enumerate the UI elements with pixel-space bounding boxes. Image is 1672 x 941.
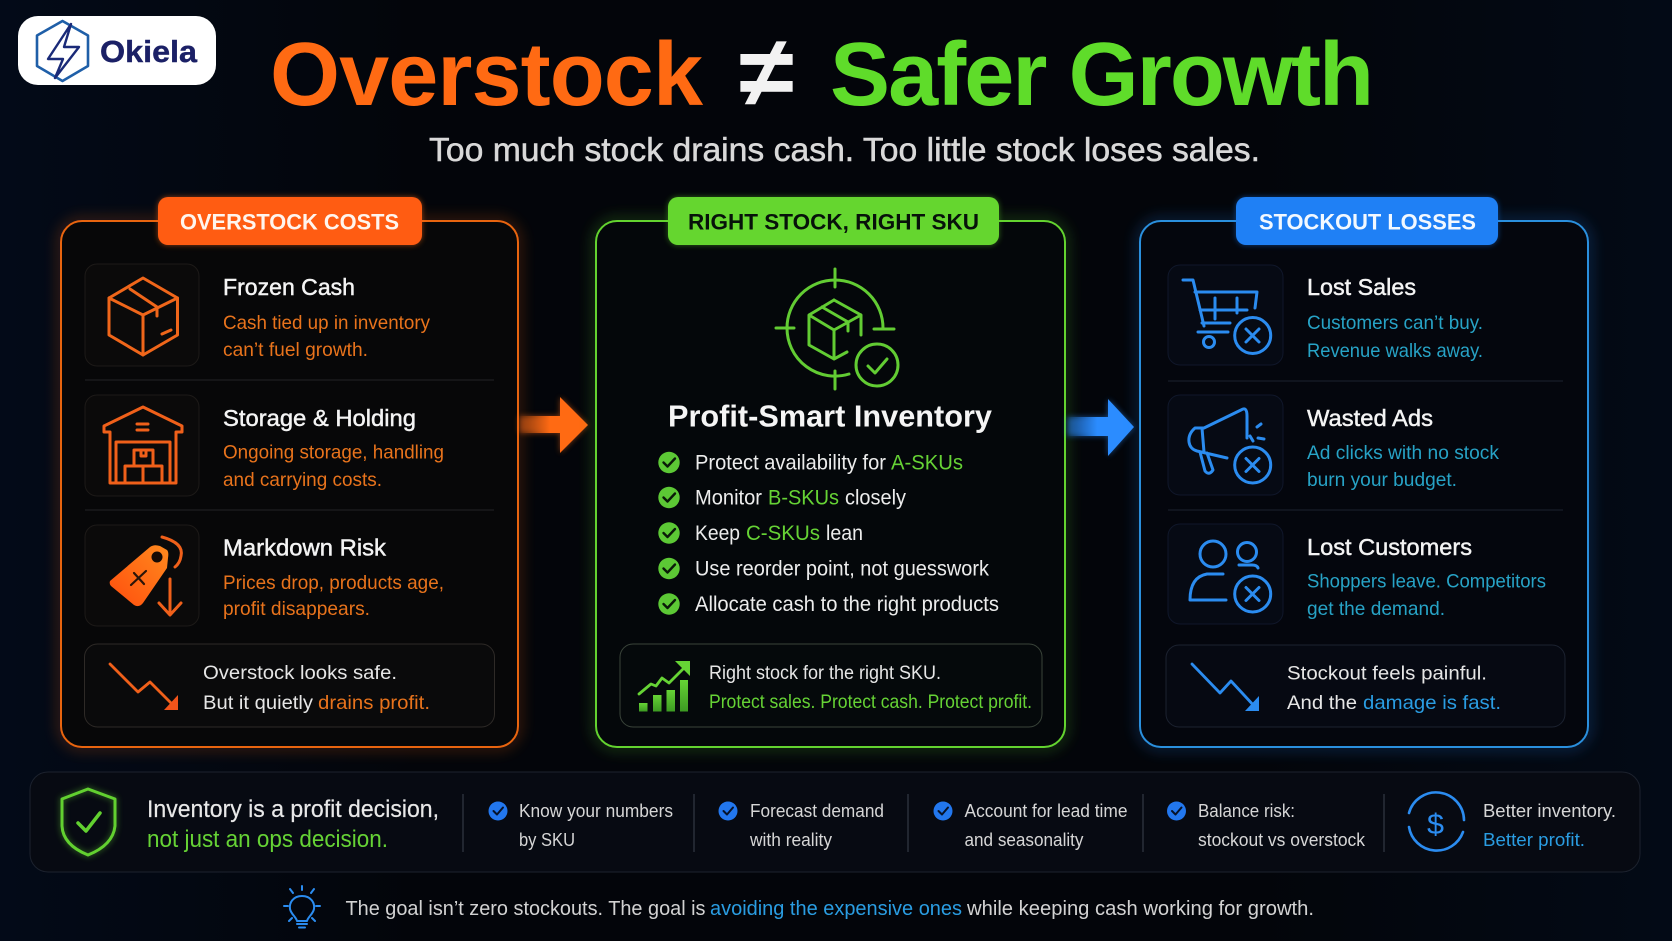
- callout: stockout feels painful: Stockout feels painful.: [1287, 662, 1487, 684]
- callout: overstock looks safe: But it quietly: [203, 692, 313, 714]
- title: ≠: [739, 16, 794, 128]
- callout: right stock for the right SKU: Right stock for the right SKU.: [709, 662, 941, 684]
- logo: Okiela: [18, 16, 216, 85]
- badge: overstock costs: [158, 197, 422, 245]
- arrow: right stock to stockout: [1067, 399, 1134, 456]
- tip: balance risk: [1167, 800, 1366, 850]
- title: Safer Growth: [830, 25, 1374, 125]
- icon: box: [109, 278, 178, 355]
- item: frozen cash: can’t fuel growth.: [223, 339, 368, 361]
- callout: right stock for the right SKU: Protect sales. Protect cash. Protect profit.: [709, 691, 1032, 713]
- item: A-SKUs: [658, 452, 963, 474]
- footer note: [284, 886, 1314, 928]
- item: C-SKUs: Keep: [695, 522, 740, 545]
- logo: Okiela: Okiela: [100, 34, 198, 69]
- title: Overstock: [270, 25, 704, 125]
- item: C-SKUs: C-SKUs: [746, 522, 820, 545]
- item: A-SKUs: Protect availability for: [695, 452, 886, 474]
- tip: lead time: [934, 800, 1128, 850]
- item: lost sales: [1168, 265, 1483, 365]
- callout: stockout feels painful: And the: [1287, 692, 1357, 714]
- item: storage and holding: and carrying costs.: [223, 469, 382, 491]
- item: frozen cash: Frozen Cash: [223, 274, 355, 300]
- tip: lead time: and seasonality: [964, 829, 1084, 850]
- callout: overstock looks safe: Overstock looks safe.: [203, 662, 397, 684]
- subtitle: Too much stock drains cash. Too little stock loses sales.: [429, 131, 1260, 168]
- tip: balance risk: Balance risk:: [1198, 800, 1295, 821]
- item: lost customers: get the demand.: [1307, 598, 1445, 620]
- headline: profit decision: not just an ops decision.: [147, 826, 388, 853]
- badge: right stock, right SKU: [668, 197, 999, 245]
- tip: know your numbers: Know your numbers: [519, 800, 673, 821]
- item: wasted ads: Wasted Ads: [1307, 405, 1433, 431]
- message: better profit: Better inventory.: [1483, 800, 1616, 821]
- panel: stockout losses: [1140, 197, 1588, 747]
- item: A-SKUs: A-SKUs: [891, 452, 963, 474]
- item: C-SKUs: lean: [826, 522, 863, 545]
- tip: forecast demand: with reality: [749, 829, 833, 850]
- icon: growth chart: [639, 661, 690, 712]
- badge: stockout losses: [1236, 197, 1498, 245]
- icon: target with box and check: [776, 269, 898, 389]
- callout: overstock looks safe: drains profit.: [318, 692, 430, 714]
- icon: falling arrow: [1192, 664, 1259, 711]
- item: C-SKUs: [658, 522, 863, 545]
- icon: dollar circle: $: [1427, 809, 1444, 841]
- icon: megaphone with x: [1189, 409, 1271, 483]
- badge: stockout losses: STOCKOUT LOSSES: [1259, 210, 1476, 234]
- item: B-SKUs: B-SKUs: [768, 486, 839, 510]
- item: lost customers: Shoppers leave. Competitors: [1307, 570, 1546, 592]
- item: lost sales: Lost Sales: [1307, 274, 1416, 300]
- item: lost customers: [1168, 524, 1546, 624]
- tip: lead time: Account for lead time: [964, 800, 1128, 821]
- callout: right stock for the right SKU: [620, 644, 1042, 727]
- checklist: [658, 452, 999, 616]
- heading: profit-smart inventory: Profit-Smart Inventory: [668, 398, 993, 434]
- item: lost sales: Revenue walks away.: [1307, 340, 1483, 362]
- message: better profit: [1483, 800, 1616, 850]
- item: wasted ads: Ad clicks with no stock: [1307, 442, 1499, 464]
- item: B-SKUs: closely: [845, 486, 906, 510]
- item: markdown risk: profit disappears.: [223, 598, 370, 620]
- footer note: while keeping cash working for growth.: [966, 898, 1314, 920]
- badge: overstock costs: OVERSTOCK COSTS: [180, 210, 399, 234]
- headline: profit decision: Inventory is a profit decision,: [147, 796, 439, 823]
- tip: forecast demand: Forecast demand: [750, 800, 884, 821]
- item: storage and holding: Storage & Holding: [223, 405, 416, 431]
- icon: dollar circle: [1409, 792, 1464, 851]
- item: B-SKUs: Monitor: [695, 486, 762, 510]
- panel: overstock costs: [61, 197, 518, 747]
- message: better profit: Better profit.: [1483, 829, 1585, 850]
- item: markdown risk: Prices drop, products age,: [223, 572, 444, 594]
- tip: balance risk: stockout vs overstock: [1198, 829, 1366, 850]
- icon: light bulb: [284, 886, 320, 928]
- panel: right stock, right SKU: [596, 197, 1065, 747]
- item: wasted ads: burn your budget.: [1307, 469, 1457, 491]
- callout: overstock looks safe: [84, 644, 494, 727]
- item: allocate cash: Allocate cash to the right products: [695, 593, 999, 616]
- item: frozen cash: [85, 264, 430, 366]
- icon: shield with check: [62, 789, 115, 855]
- icon: falling arrow: [110, 664, 178, 710]
- footer note: avoiding the expensive ones: [710, 898, 962, 920]
- icon: people with x: [1190, 541, 1271, 612]
- item: B-SKUs: [658, 486, 906, 510]
- item: storage and holding: [85, 395, 444, 496]
- headline: profit decision: [147, 796, 439, 853]
- item: wasted ads: [1168, 395, 1499, 495]
- title: [270, 16, 1374, 128]
- callout: stockout feels painful: [1166, 645, 1565, 727]
- item: markdown risk: Markdown Risk: [223, 534, 387, 560]
- tip: know your numbers: [488, 800, 673, 850]
- icon: price tag: [110, 537, 181, 615]
- item: markdown risk: [85, 525, 444, 626]
- item: lost sales: Customers can’t buy.: [1307, 312, 1483, 334]
- item: lost customers: Lost Customers: [1307, 534, 1472, 560]
- bottom bar: [30, 772, 1640, 872]
- icon: warehouse: [104, 407, 182, 483]
- icon: cart with x: [1183, 280, 1271, 354]
- arrow: overstock to right stock: [519, 397, 588, 453]
- item: frozen cash: Cash tied up in inventory: [223, 312, 430, 334]
- tip: know your numbers: by SKU: [519, 829, 575, 850]
- footer note: The goal isn’t zero stockouts. The goal is: [346, 898, 706, 920]
- badge: right stock, right SKU: RIGHT STOCK, RIGHT SKU: [688, 210, 979, 234]
- item: reorder point: Use reorder point, not guesswork: [695, 558, 989, 580]
- tip: forecast demand: [718, 800, 884, 850]
- callout: stockout feels painful: damage is fast.: [1363, 692, 1501, 714]
- item: storage and holding: Ongoing storage, handling: [223, 442, 444, 464]
